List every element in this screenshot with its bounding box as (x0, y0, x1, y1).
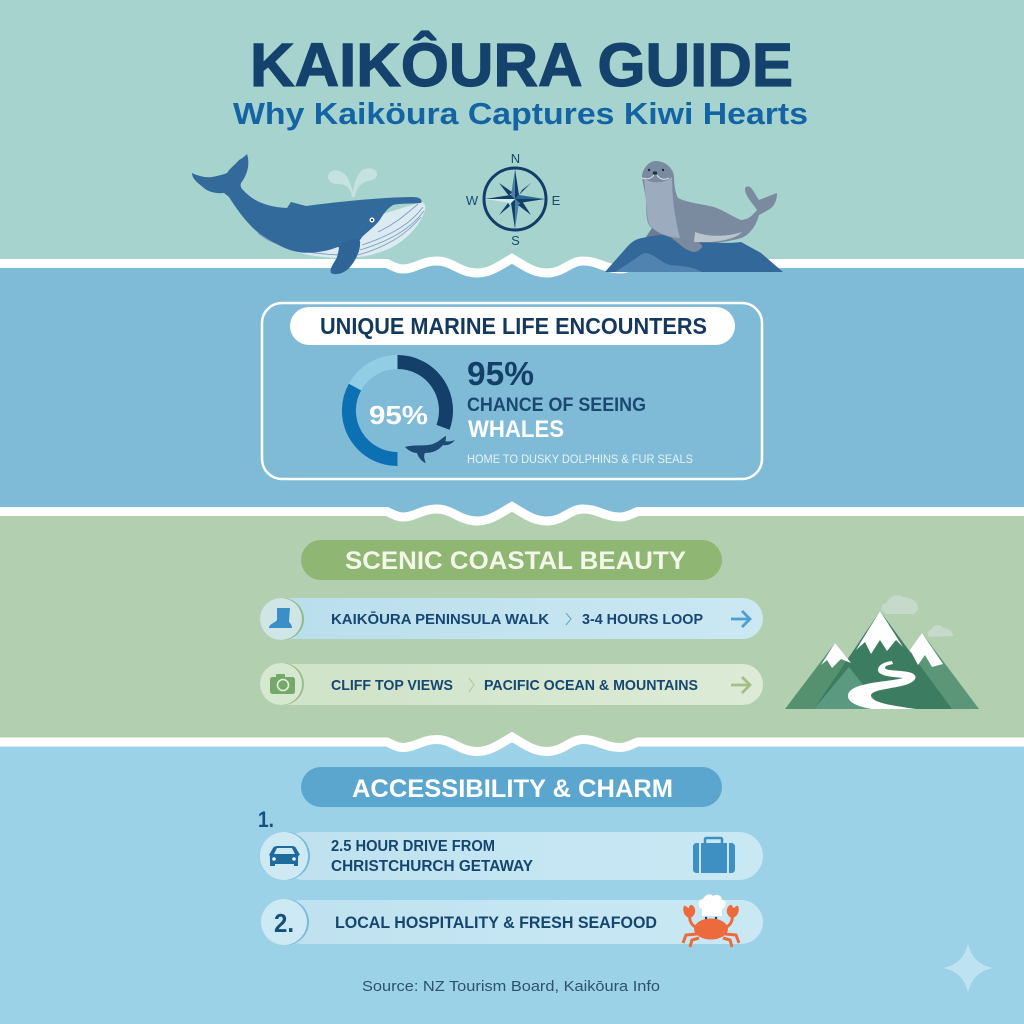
rock (605, 235, 783, 272)
subtitle: Why Kaiköura Captures Kiwi Hearts (233, 96, 808, 131)
whale eye (370, 218, 374, 222)
icon: whale (192, 154, 425, 274)
icon: whale spout (328, 168, 377, 197)
icon: mountains (785, 595, 979, 709)
seal body (642, 161, 777, 252)
icon: seal on rock (605, 161, 783, 272)
arrow (731, 677, 750, 693)
donut value: 95% (369, 400, 428, 430)
number one: 1. (258, 807, 274, 832)
heading pill (301, 767, 722, 807)
panel: marine life (262, 303, 762, 479)
icon: boot (269, 608, 292, 628)
row: peninsula walk (260, 598, 763, 640)
whale throat (253, 202, 425, 258)
clouds (881, 595, 918, 614)
icon: car (269, 846, 300, 866)
row icon disc (262, 832, 310, 880)
stat note: HOME TO DUSKY DOLPHINS & FUR SEALS (467, 454, 693, 466)
seal face (648, 169, 650, 171)
seal rear flipper (646, 225, 665, 240)
background: header band (0, 0, 1024, 270)
background: marine band (0, 258, 1024, 524)
heading: SCENIC COASTAL BEAUTY (345, 547, 686, 575)
row text: CLIFF TOP VIEWS (331, 677, 453, 694)
stat label: CHANCE OF SEEING (467, 395, 646, 416)
row text: 2.5 HOUR DRIVE FROM (331, 838, 495, 855)
row: drive: CHRISTCHURCH GETAWAY (331, 858, 534, 875)
icon: crab with chef hat (683, 894, 739, 947)
stat: 95 percent: 95% (467, 355, 534, 392)
seal chest (644, 177, 680, 238)
chevron (566, 613, 571, 625)
whale flipper (331, 239, 360, 274)
panel frame (262, 303, 762, 479)
compass letters: E (552, 193, 561, 208)
background: coastal band (0, 506, 1024, 752)
whale body (192, 154, 422, 253)
heading pill (301, 540, 722, 580)
panel: coastal beauty (260, 540, 979, 709)
compass letters: W (466, 193, 479, 208)
row: cliff top views: PACIFIC OCEAN & MOUNTAINS (484, 677, 698, 694)
icon: camera (270, 674, 295, 694)
row icon disc (262, 598, 304, 640)
compass letters: S (511, 233, 520, 248)
row text: KAIKŌURA PENINSULA WALK (331, 611, 549, 628)
arrow (731, 611, 750, 627)
compass letters: N (511, 151, 520, 166)
heading: UNIQUE MARINE LIFE ENCOUNTERS (320, 313, 707, 339)
heading pill (290, 307, 735, 345)
icon: suitcase (693, 838, 735, 873)
number two: 2. (274, 908, 294, 938)
heading: ACCESSIBILITY & CHARM (352, 775, 673, 803)
donut chart (349, 362, 446, 459)
chevron (469, 678, 474, 692)
title: KAIKÔURA GUIDE (250, 31, 793, 99)
row: cliff top views (260, 663, 763, 705)
winding path (848, 661, 916, 709)
row: hospitality (261, 894, 763, 947)
row icon disc (262, 663, 304, 705)
row text: LOCAL HOSPITALITY & FRESH SEAFOOD (335, 913, 657, 932)
snow caps (856, 611, 903, 654)
row: drive (260, 832, 763, 880)
stat highlight: WHALES (468, 416, 564, 443)
source line: Source: NZ Tourism Board, Kaikōura Info (362, 978, 660, 995)
compass letters (466, 151, 561, 248)
row icon disc (263, 899, 309, 945)
icon: small whale (405, 436, 455, 463)
row: peninsula walk: 3-4 HOURS LOOP (582, 611, 703, 628)
chef hat (699, 894, 726, 916)
icon: sparkle (943, 943, 993, 993)
icon: compass (466, 151, 561, 248)
panel: accessibility (258, 767, 763, 947)
background: accessibility band (0, 737, 1024, 1024)
